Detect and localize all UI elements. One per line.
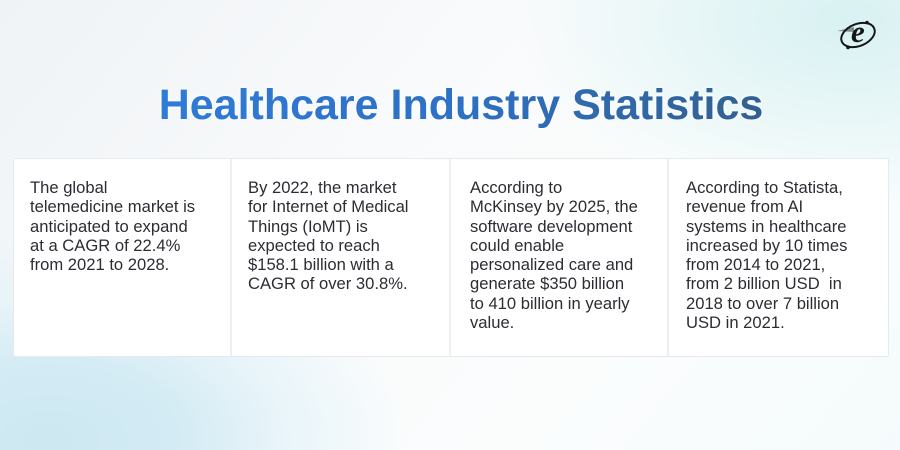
text: McKinsey forecast: could enable — [470, 236, 564, 255]
text: IoMT market: $158.1 billion with a — [248, 255, 394, 274]
text: McKinsey forecast: value. — [470, 313, 514, 332]
text: Statista AI revenue: USD in 2021. — [686, 313, 785, 332]
title: Healthcare Industry Statistics — [159, 81, 763, 129]
text: IoMT market: By 2022, the market — [248, 178, 397, 197]
text: Statista AI revenue — [686, 178, 847, 332]
text: Statista AI revenue: increased by 10 times — [686, 236, 847, 255]
text: McKinsey forecast: generate $350 billion — [470, 274, 624, 293]
text: McKinsey forecast: software development — [470, 216, 632, 236]
text: telemedicine market — [30, 178, 195, 274]
text: IoMT market: CAGR of over 30.8%. — [248, 274, 408, 293]
panel: statistics cards — [13, 158, 889, 357]
text: Statista AI revenue: 2018 to over 7 billion — [686, 294, 839, 312]
text: telemedicine market: anticipated to expand — [30, 216, 188, 236]
text: IoMT market: Things (IoMT) is — [248, 216, 368, 236]
text: telemedicine market: telemedicine market is — [30, 197, 195, 216]
text: McKinsey forecast — [470, 178, 638, 332]
text: McKinsey forecast: to 410 billion in yearly — [470, 294, 630, 312]
text: McKinsey forecast: McKinsey by 2025, the — [470, 197, 638, 216]
text: Statista AI revenue: According to Statista, — [686, 178, 843, 197]
text: Statista AI revenue: from 2 billion USD in — [686, 274, 842, 293]
text: telemedicine market: at a CAGR of 22.4% — [30, 236, 180, 255]
text: IoMT market: expected to reach — [248, 236, 380, 255]
text: McKinsey forecast: According to — [470, 178, 562, 197]
text: McKinsey forecast: personalized care and — [470, 255, 633, 274]
text: Statista AI revenue: revenue from AI — [686, 197, 803, 216]
text: IoMT market — [248, 178, 408, 293]
text: Statista AI revenue: from 2014 to 2021, — [686, 255, 825, 274]
text: Statista AI revenue: systems in healthcare — [686, 216, 846, 236]
text: telemedicine market: The global — [30, 178, 108, 197]
text: IoMT market: for Internet of Medical — [248, 197, 408, 216]
logo icon — [837, 18, 876, 50]
text: telemedicine market: from 2021 to 2028. — [30, 255, 169, 274]
